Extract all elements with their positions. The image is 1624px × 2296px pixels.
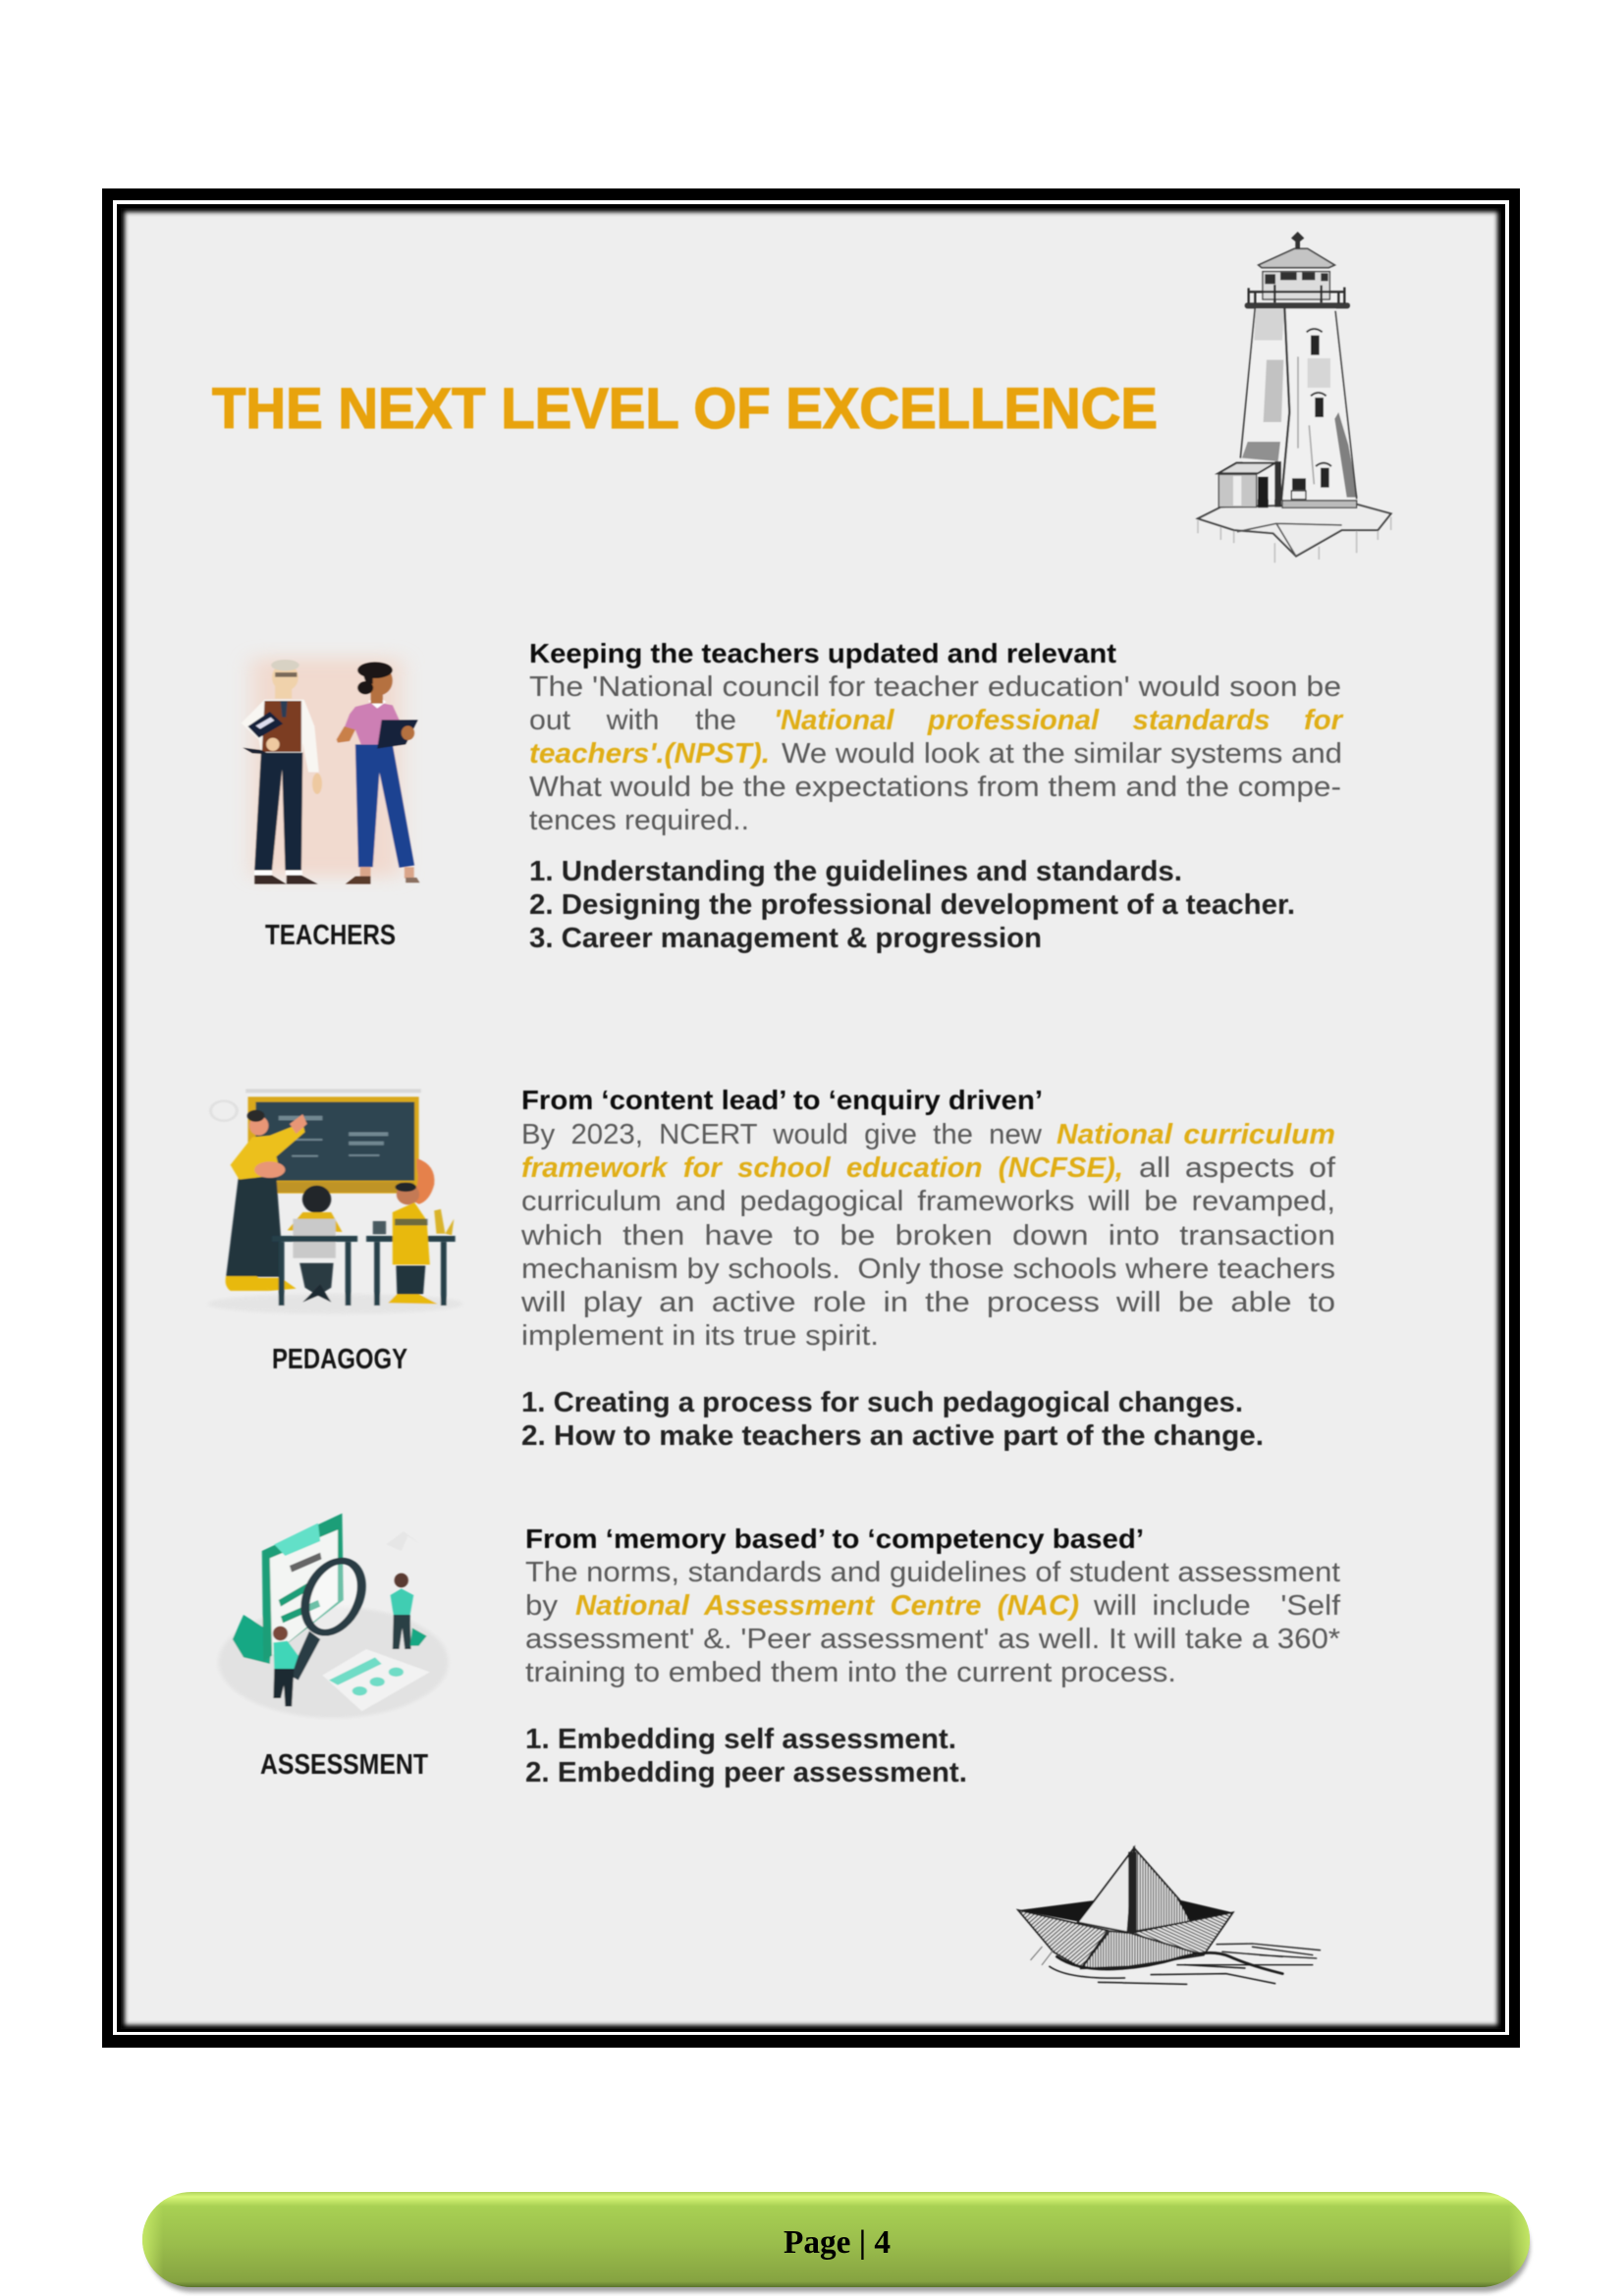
label: pedagogy: PEDAGOGY xyxy=(272,1344,407,1375)
text: teachers content: What would be the expectations from them and the compe- xyxy=(529,772,1341,803)
text: assessment content: The norms, standards and guidelines of student assessment xyxy=(525,1557,1340,1588)
text: assessment content: From ‘memory based’ to ‘competency based’ xyxy=(525,1523,1144,1554)
text: pedagogy content: National curriculum xyxy=(1056,1119,1335,1150)
text: assessment content: training to embed them into the current process. xyxy=(525,1657,1176,1688)
section: assessment xyxy=(219,1514,1341,1789)
text: assessment content: will include 'Self xyxy=(1093,1590,1341,1622)
text: pedagogy content: 2. How to make teachers an active part of the change. xyxy=(521,1420,1264,1452)
text: teachers content: tences required.. xyxy=(529,805,749,836)
label: assessment: ASSESSMENT xyxy=(260,1749,428,1781)
text: teachers content: Keeping the teachers updated and relevant xyxy=(529,638,1116,668)
text: assessment content: 1. Embedding self assessment. xyxy=(525,1724,956,1755)
title: THE NEXT LEVEL OF EXCELLENCE xyxy=(212,377,1158,441)
text: pedagogy content: will play an active role in the process will be able to xyxy=(520,1287,1335,1318)
section: pedagogy xyxy=(208,1085,1336,1452)
text: teachers content: teachers'.(NPST). xyxy=(529,738,770,770)
text: assessment content: 2. Embedding peer assessment. xyxy=(525,1757,967,1789)
illustration: assessment magnifier xyxy=(219,1514,449,1718)
text: teachers content: 'National professional standards for xyxy=(774,705,1344,736)
text: pedagogy content: 1. Creating a process for such pedagogical changes. xyxy=(521,1387,1243,1418)
text: teachers content: We would look at the similar systems and xyxy=(782,738,1342,770)
text: pedagogy content: which then have to be broken down into transaction xyxy=(520,1220,1335,1252)
text: teachers content: 2. Designing the professional development of a teacher. xyxy=(529,889,1295,921)
text: assessment content: National Assessment Centre (NAC) xyxy=(575,1590,1079,1622)
icon: lighthouse sketch xyxy=(1198,232,1391,562)
text: teachers content: 3. Career management & progression xyxy=(529,923,1042,954)
text: pedagogy content: implement in its true spirit. xyxy=(521,1320,879,1352)
text: assessment content: by xyxy=(525,1590,559,1622)
text: pedagogy content xyxy=(520,1085,1336,1452)
section: teachers xyxy=(242,638,1344,954)
text: pedagogy content: curriculum and pedagogical frameworks will be revamped, xyxy=(521,1186,1335,1217)
text: pedagogy content: From ‘content lead’ to ‘enquiry driven’ xyxy=(521,1085,1043,1115)
text: teachers content: 1. Understanding the guidelines and standards. xyxy=(529,856,1182,887)
footer: green page pill xyxy=(142,2192,1530,2292)
illustration: pedagogy classroom xyxy=(208,1089,462,1313)
illustration: teachers xyxy=(242,658,419,884)
text: pedagogy content: framework for school education (NCFSE), xyxy=(521,1152,1123,1184)
text: teachers content: The 'National council for teacher education' would soon be xyxy=(529,671,1341,703)
page number: Page | 4 xyxy=(784,2224,891,2261)
text: assessment content: assessment' &. 'Peer assessment' as well. It will take a 360* xyxy=(525,1624,1340,1655)
icon: paper boat sketch xyxy=(1018,1848,1320,1984)
text: assessment content xyxy=(525,1523,1341,1789)
page frame: black double border with grey panel xyxy=(102,188,1520,2048)
text: teachers content xyxy=(529,638,1344,954)
text: pedagogy content: By 2023, NCERT would give the new xyxy=(521,1119,1043,1150)
text: pedagogy content: all aspects of xyxy=(1139,1152,1336,1184)
label: teachers: TEACHERS xyxy=(265,920,396,951)
text: teachers content: out with the xyxy=(529,705,736,736)
text: pedagogy content: mechanism by schools. Only those schools where teachers xyxy=(521,1254,1335,1285)
